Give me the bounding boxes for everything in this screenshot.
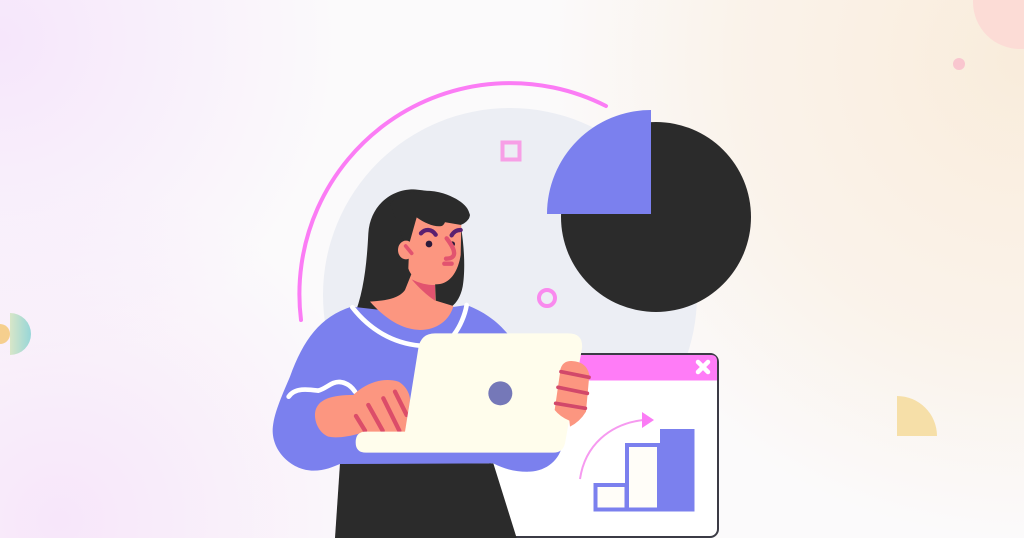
laptop	[356, 333, 582, 453]
nose	[446, 238, 454, 259]
large grey background circle	[323, 108, 697, 482]
laptop logo	[488, 381, 512, 405]
decorative quarter circle right	[897, 396, 937, 436]
ear	[398, 241, 414, 259]
neck shadow	[412, 279, 435, 301]
decorative half circle left	[0, 313, 31, 355]
icon: small square	[502, 142, 520, 160]
bar chart	[596, 429, 694, 512]
sleeve wrinkle	[289, 382, 355, 397]
left hand	[315, 380, 410, 437]
pink arc	[299, 83, 606, 320]
icon: small ring	[539, 290, 555, 306]
collar	[352, 305, 467, 346]
growth arrow	[580, 412, 654, 479]
face	[408, 217, 461, 284]
fringe	[390, 191, 469, 240]
pie chart	[547, 110, 751, 312]
hair back	[353, 189, 470, 318]
woman figure	[273, 189, 589, 538]
sweater	[273, 305, 563, 472]
eyes	[426, 241, 455, 247]
icon: close x	[698, 362, 708, 372]
right hand	[555, 361, 589, 427]
eyebrows	[421, 230, 461, 235]
window title bar	[560, 355, 717, 380]
skirt	[335, 463, 517, 538]
neck and chest	[370, 273, 453, 330]
decorative dot top right	[953, 58, 965, 70]
mouth	[444, 257, 452, 270]
decorative circle top right	[973, 0, 1024, 49]
window panel with bar chart	[490, 354, 718, 537]
